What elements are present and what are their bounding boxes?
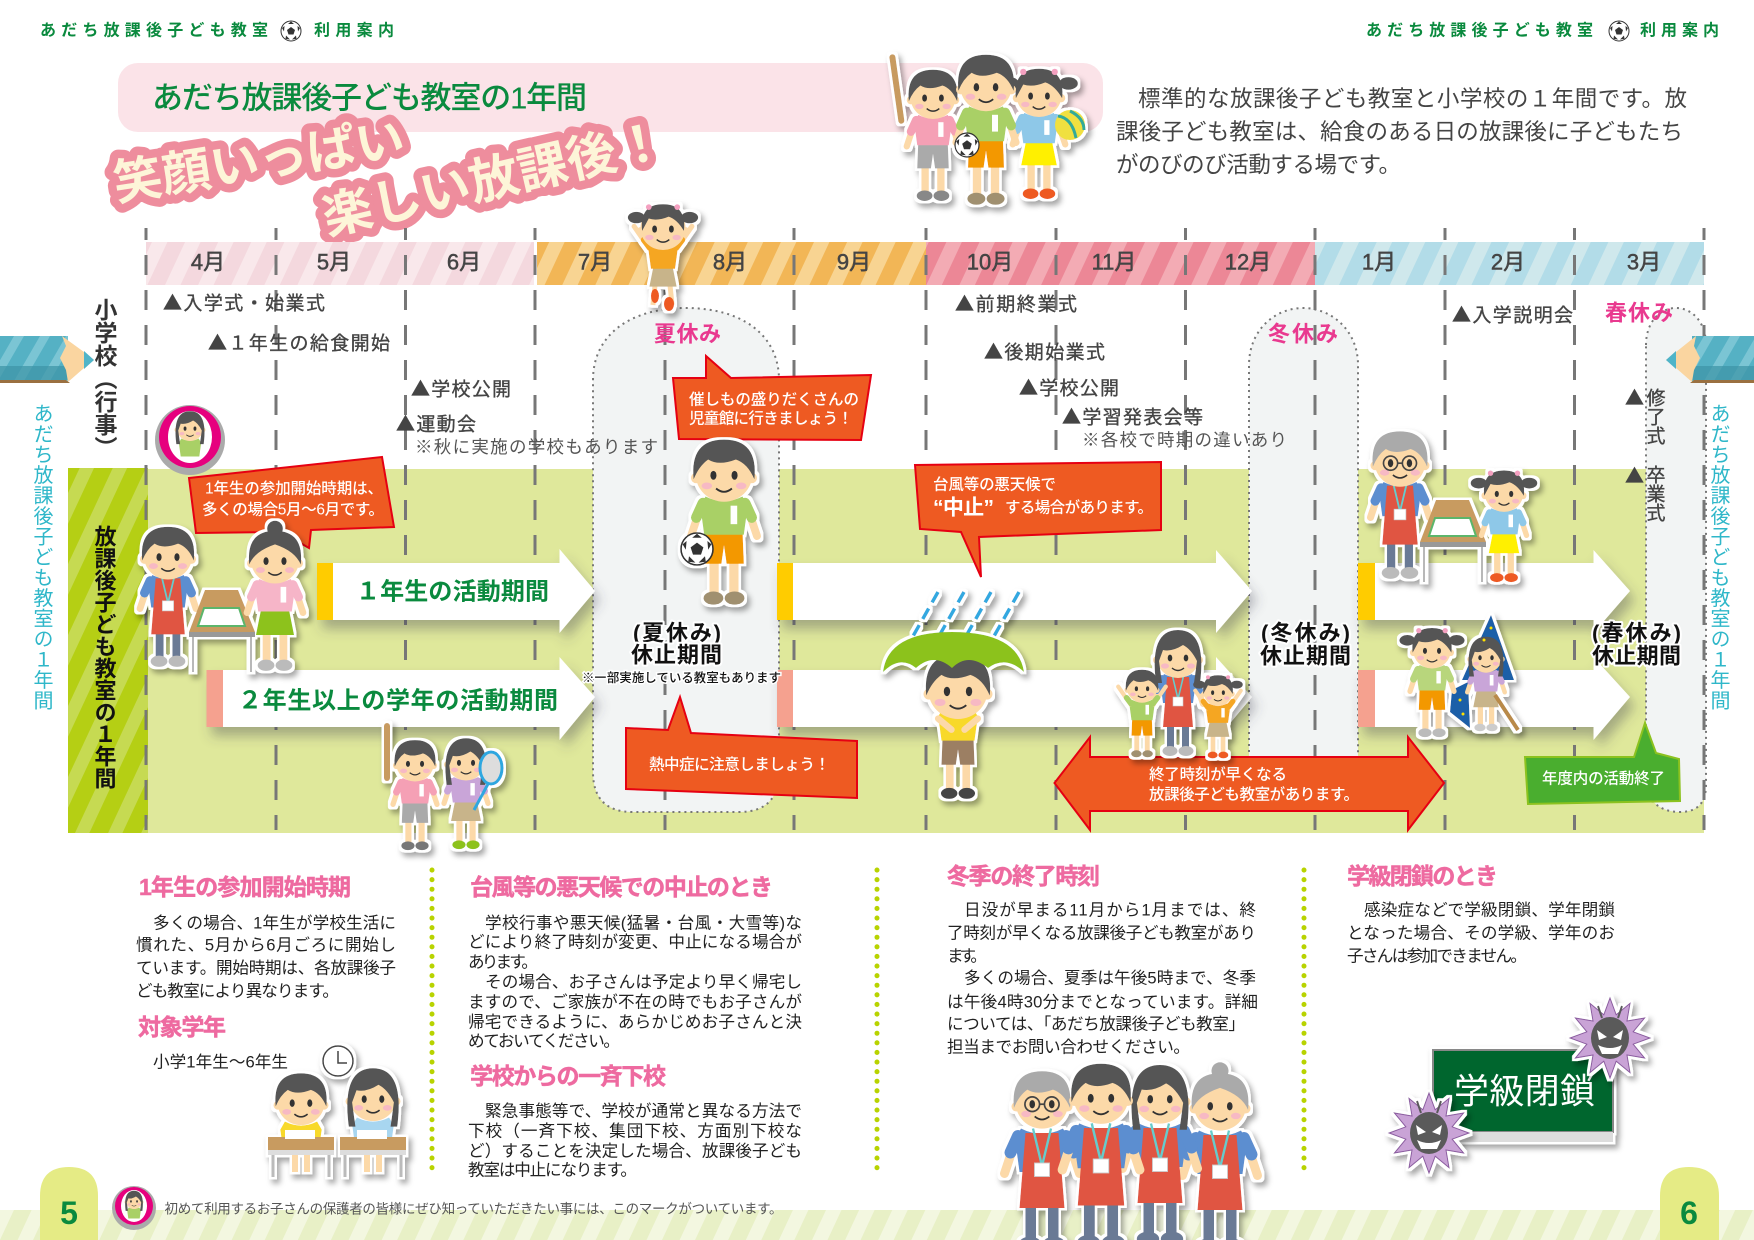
text block: weather cancellation: あります。 (468, 952, 538, 972)
side label: right: あだち放課後子ども教室の１年間 (1707, 403, 1730, 710)
title banner: あだち放課後子ども教室の1年間 (152, 80, 587, 116)
text block: first-grade start: ども教室により異なります。 (136, 982, 339, 1000)
text block: winter closing time: ます。 (947, 946, 987, 966)
callout: end of year: 年度内の活動終了 (1542, 770, 1665, 788)
month labels: 11月 (1092, 250, 1136, 274)
illustration: boy with soccer ball (681, 440, 757, 605)
page tab: 5 (40, 1167, 98, 1240)
text block: winter closing time (947, 863, 1258, 1056)
illustration: class closure blackboard: 学級閉鎖 (1454, 1072, 1595, 1112)
illustration: spring cleaning pair (1399, 615, 1518, 737)
double arrow: earlier closing: 放課後子ども教室があります。 (1149, 784, 1359, 804)
callout: heat warning: 熱中症に注意しましょう！ (649, 756, 830, 774)
school events: first half (163, 288, 658, 457)
text block: class closure: 子さんは参加できません。 (1347, 946, 1527, 966)
pencil: right (1666, 336, 1754, 383)
callout: end of year (1525, 723, 1680, 804)
callout: first-grade start: 多くの場合5月～6月です。 (202, 500, 384, 518)
break labels: 春休み (1605, 300, 1673, 326)
text block: winter closing time: 冬季の終了時刻 (947, 863, 1100, 889)
school events: second half: ▲前期終業式 (955, 290, 1077, 316)
text block: eligible grades (138, 1014, 288, 1072)
closure labels: 休止期間 (1592, 644, 1681, 668)
month band (146, 242, 1704, 285)
closure labels: (夏休み) (633, 620, 721, 646)
text block: winter closing time: については、「あだち放課後子ども教室」 (947, 1014, 1245, 1034)
arrow labels: １年生の活動期間 (356, 578, 549, 606)
school events: vertical: ▲ (1625, 462, 1644, 488)
text block: class closure (1347, 863, 1615, 966)
illustration: staff, desk and mother (140, 521, 303, 672)
arrow: upper-grade activity spring (206, 657, 595, 740)
month labels: 5月 (317, 250, 351, 274)
header: right page running head (1366, 20, 1719, 41)
text block: weather cancellation: めておいてください。 (468, 1032, 620, 1050)
intro paragraph: がのびのび活動する場です。 (1116, 152, 1401, 178)
school events: second half: ▲学習発表会等 (1062, 402, 1203, 430)
panel: program row background (146, 469, 1704, 833)
text block: weather cancellation: ますので、ご家族が不在の時でもお子さんが (468, 992, 802, 1012)
header: left page running head: あだち放課後子ども教室 (40, 20, 268, 40)
text block: first-grade start: 慣れた、5月から6月ごろに開始し (136, 936, 396, 954)
callout: typhoon cancellation (915, 462, 1161, 577)
text block: winter closing time: 日没が早まる11月から1月までは、終 (964, 900, 1256, 920)
text block: weather cancellation: その場合、お子さんは予定より早く帰宅し (485, 972, 802, 992)
slogan: 楽しい放課後！ (317, 112, 671, 246)
pencil: left (0, 336, 94, 383)
break labels (654, 300, 1673, 346)
month labels: 6月 (447, 250, 481, 274)
text block: class closure: となった場合、その学級、学年のお (1347, 924, 1615, 942)
text block: class closure: 学級閉鎖のとき (1347, 863, 1498, 889)
school events: second half: ▲後期始業式 (984, 338, 1105, 364)
icon: virus bottom (1389, 1093, 1469, 1173)
side label: left: あだち放課後子ども教室の１年間 (30, 403, 53, 710)
illustration: three children (889, 54, 1085, 205)
text block: weather cancellation: 台風等の悪天候での中止のとき (470, 874, 773, 900)
text block: group dismissal (468, 1063, 802, 1180)
month labels: 10月 (967, 250, 1013, 274)
text block: first-grade start: 1年生の参加開始時期 (139, 874, 351, 900)
illustration: class closure blackboard (1433, 1050, 1613, 1142)
text block: group dismissal: 緊急事態等で、学校が通常と異なる方法で (485, 1102, 802, 1120)
arrow: first-grade activity winter (1358, 550, 1630, 633)
month labels: 1月 (1362, 250, 1396, 274)
intro paragraph (1116, 86, 1687, 178)
illustration: four staff (1004, 1062, 1258, 1240)
text block: group dismissal: ど）することを決定した場合、放課後子ども (468, 1142, 802, 1160)
school events: vertical: 卒業式 (1642, 465, 1670, 522)
closure labels (582, 620, 1681, 685)
month labels: 2月 (1491, 250, 1525, 274)
text block: winter closing time: 了時刻が早くなる放課後子ども教室があり (947, 924, 1256, 942)
school events: vertical (1625, 384, 1670, 522)
text block: class closure: 感染症などで学級閉鎖、学年閉鎖 (1364, 900, 1615, 920)
text block: first-grade start: 多くの場合、1年生が学校生活に (153, 914, 396, 932)
text block: winter closing time: 多くの場合、夏季は午後5時まで、冬季 (964, 968, 1256, 988)
icon: virus top (1570, 998, 1650, 1078)
header: right page running head: あだち放課後子ども教室 (1366, 20, 1593, 40)
school events: first half: ▲運動会 (396, 410, 476, 436)
callout: first-grade start: 1年生の参加開始時期は、 (205, 480, 383, 498)
panel: program row label (68, 468, 148, 833)
text block: winter closing time: 担当までお問い合わせください。 (947, 1038, 1190, 1056)
arrow: upper-grade activity autumn (777, 657, 1252, 740)
text block: first-grade start: ています。開始時期は、各放課後子 (136, 958, 396, 978)
illustration: grandfather and girl at desk (1370, 431, 1537, 582)
month labels: 8月 (713, 250, 747, 274)
month labels: 7月 (578, 250, 612, 274)
callout: first-grade start (189, 457, 394, 548)
intro paragraph: 標準的な放課後子ども教室と小学校の１年間です。放 (1138, 86, 1687, 112)
arrow labels (238, 578, 558, 714)
panel: winter break capsule (1249, 308, 1358, 806)
text block: weather cancellation (468, 874, 802, 1050)
break labels: 冬休み (1268, 322, 1338, 346)
school events: first half: ※秋に実施の学校もあります (415, 437, 658, 457)
header: left page running head: 利用案内 (314, 22, 394, 40)
school events: vertical: 修了式 (1642, 388, 1670, 445)
month labels: 12月 (1225, 250, 1271, 274)
text block: first-grade start (136, 874, 396, 1000)
footer mark and note (112, 1186, 782, 1230)
illustration: umbrella and rain (883, 592, 1024, 799)
school events: first half: ▲１年生の給食開始 (208, 328, 390, 356)
icon: first-time parents mark (155, 405, 225, 475)
school events: vertical: ▲ (1625, 384, 1644, 410)
month labels: 3月 (1627, 250, 1661, 274)
page tab: 6: 6 (1680, 1195, 1698, 1231)
callout: typhoon cancellation: する場合があります。 (1005, 498, 1153, 516)
illustration: jumping girl (628, 204, 698, 311)
text block: eligible grades: 対象学年 (138, 1014, 226, 1040)
illustration: winter group (1118, 630, 1243, 758)
callout: typhoon cancellation: “中止” (933, 496, 994, 520)
closure labels: 休止期間 (631, 642, 722, 668)
closure labels: (冬休み) (1261, 620, 1350, 646)
footer mark and note: 初めて利用するお子さんの保護者の皆様にぜひ知っていただきたい事には、このマークがついています。 (164, 1200, 782, 1216)
panel: spring break capsule (1646, 308, 1706, 812)
footer band (0, 1210, 1754, 1240)
school events: first half: ▲学校公開 (411, 374, 511, 402)
slogan: 笑顔いっぱい (110, 112, 408, 212)
label: elementary school events: 小学校（行事） (91, 298, 118, 459)
panel: program row label: 放課後子ども教室の１年間 (92, 525, 116, 789)
arrow: upper-grade activity winter (1358, 657, 1630, 740)
text block: weather cancellation: どにより終了時刻が変更、中止になる場合が (468, 932, 802, 952)
text block: group dismissal: 下校（一斉下校、集団下校、方面別下校な (468, 1122, 802, 1140)
closure labels: (春休み) (1592, 620, 1681, 646)
school events: second half: ▲学校公開 (1019, 374, 1119, 400)
intro paragraph: 課後子ども教室は、給食のある日の放課後に子どもたち (1116, 120, 1683, 144)
page tab: 5: 5 (60, 1195, 78, 1231)
text block: weather cancellation: 帰宅できるように、あらかじめお子さんと決 (468, 1012, 802, 1032)
dividers (432, 870, 1304, 1176)
school events: second half (955, 290, 1573, 450)
callout: children's hall: 児童館に行きましょう！ (689, 410, 853, 428)
slogan (110, 112, 671, 246)
double arrow: earlier closing: 終了時刻が早くなる (1149, 764, 1287, 784)
page tab: 6 (1660, 1167, 1719, 1240)
month labels: 9月 (837, 250, 871, 274)
callout: children's hall: 催しもの盛りだくさんの (689, 390, 859, 408)
panel: summer break capsule (593, 308, 779, 812)
text block: eligible grades: 小学1年生～6年生 (153, 1052, 288, 1072)
closure labels: 休止期間 (1260, 644, 1351, 668)
text block: weather cancellation: 学校行事や悪天候(猛暑・台風・大雪等)な (485, 914, 802, 932)
illustration: pair with bat and racket (384, 723, 502, 850)
arrow: first-grade activity spring (317, 549, 595, 633)
double arrow: earlier closing (1054, 737, 1444, 830)
illustration: students at desks (268, 1068, 406, 1177)
school events: second half: ▲入学説明会 (1452, 300, 1573, 328)
text block: winter closing time: は午後4時30分までとなっています。詳細 (947, 992, 1258, 1012)
callout: typhoon cancellation: 台風等の悪天候で (933, 476, 1056, 494)
arrow: first-grade activity autumn (777, 550, 1252, 633)
callout: heat warning (626, 697, 857, 798)
icon: clock (323, 1046, 353, 1076)
month labels: 4月 (191, 250, 225, 274)
arrow labels: ２年生以上の学年の活動期間 (238, 688, 558, 714)
closure labels: ※一部実施している教室もあります (582, 670, 781, 685)
text block: group dismissal: 教室は中止になります。 (468, 1160, 637, 1180)
break labels: 夏休み (654, 322, 721, 346)
header: right page running head: 利用案内 (1640, 22, 1719, 40)
callout: children's hall (673, 356, 871, 440)
title banner (118, 63, 1103, 132)
text block: group dismissal: 学校からの一斉下校 (470, 1063, 666, 1089)
school events: second half: ※各校で時期の違いあり (1082, 430, 1287, 450)
header: left page running head (40, 20, 394, 41)
school events: first half: ▲入学式・始業式 (163, 288, 325, 316)
month labels (191, 250, 1661, 274)
